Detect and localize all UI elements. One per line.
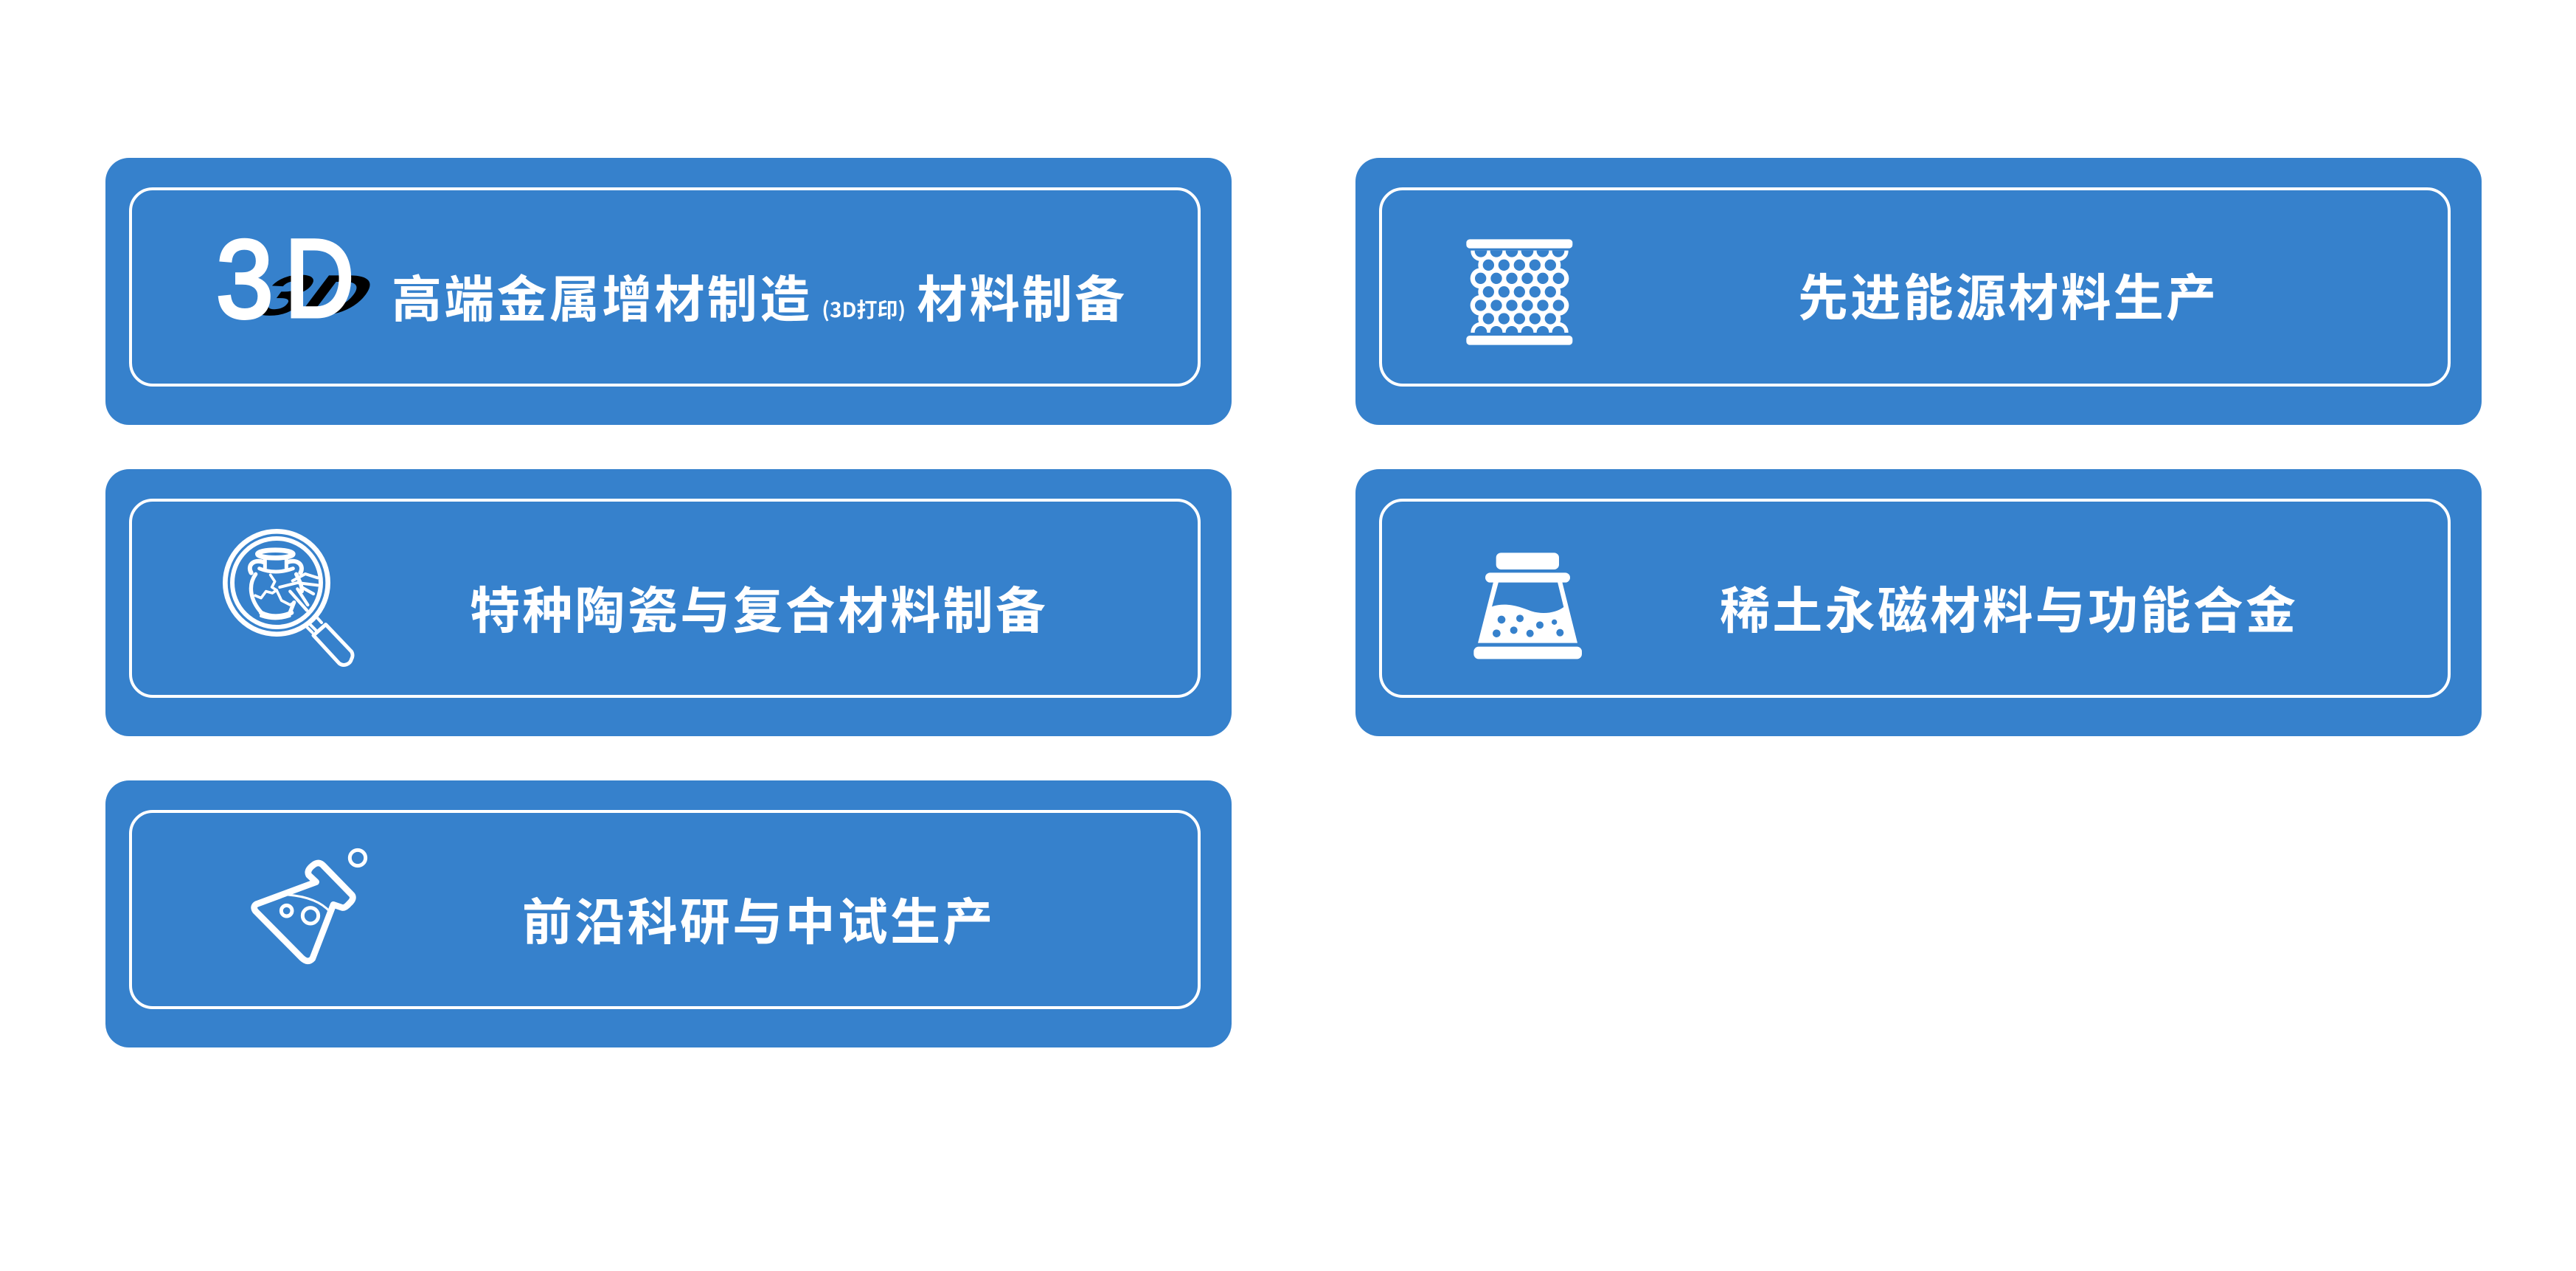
panel: special ceramics and composites: [105, 469, 1232, 736]
inner frame: [129, 810, 1201, 1009]
heading: 先进能源材料生产: [1798, 271, 2218, 327]
icon: powder bottle: [1473, 553, 1582, 659]
icon: tilted flask: [251, 848, 367, 965]
heading: 前沿科研与中试生产: [522, 895, 996, 951]
icon: porous filter: [1466, 239, 1572, 345]
icon part: white D: D: [285, 216, 354, 340]
inner frame: [129, 499, 1201, 698]
heading: 高端金属增材制造 材料制备: [392, 272, 1128, 328]
panel: rare earth magnetic materials: [1355, 469, 2482, 736]
icon: 3D: [216, 216, 393, 341]
heading: 稀土永磁材料与功能合金: [1720, 583, 2298, 640]
icon part: white 3: 3: [216, 217, 274, 341]
icon part: black 3D shadow: 3D: [237, 263, 393, 328]
panel: advanced energy materials: [1355, 158, 2482, 425]
heading: 特种陶瓷与复合材料制备: [470, 583, 1048, 640]
icon: magnifier over cracked jar: [223, 529, 354, 667]
inner frame: [1379, 187, 2451, 387]
inner frame: [129, 187, 1201, 387]
heading: (3D打印): [822, 294, 906, 324]
panel: additive manufacturing: [105, 158, 1232, 425]
inner frame: [1379, 499, 2451, 698]
panel: frontier research and pilot production: [105, 780, 1232, 1047]
